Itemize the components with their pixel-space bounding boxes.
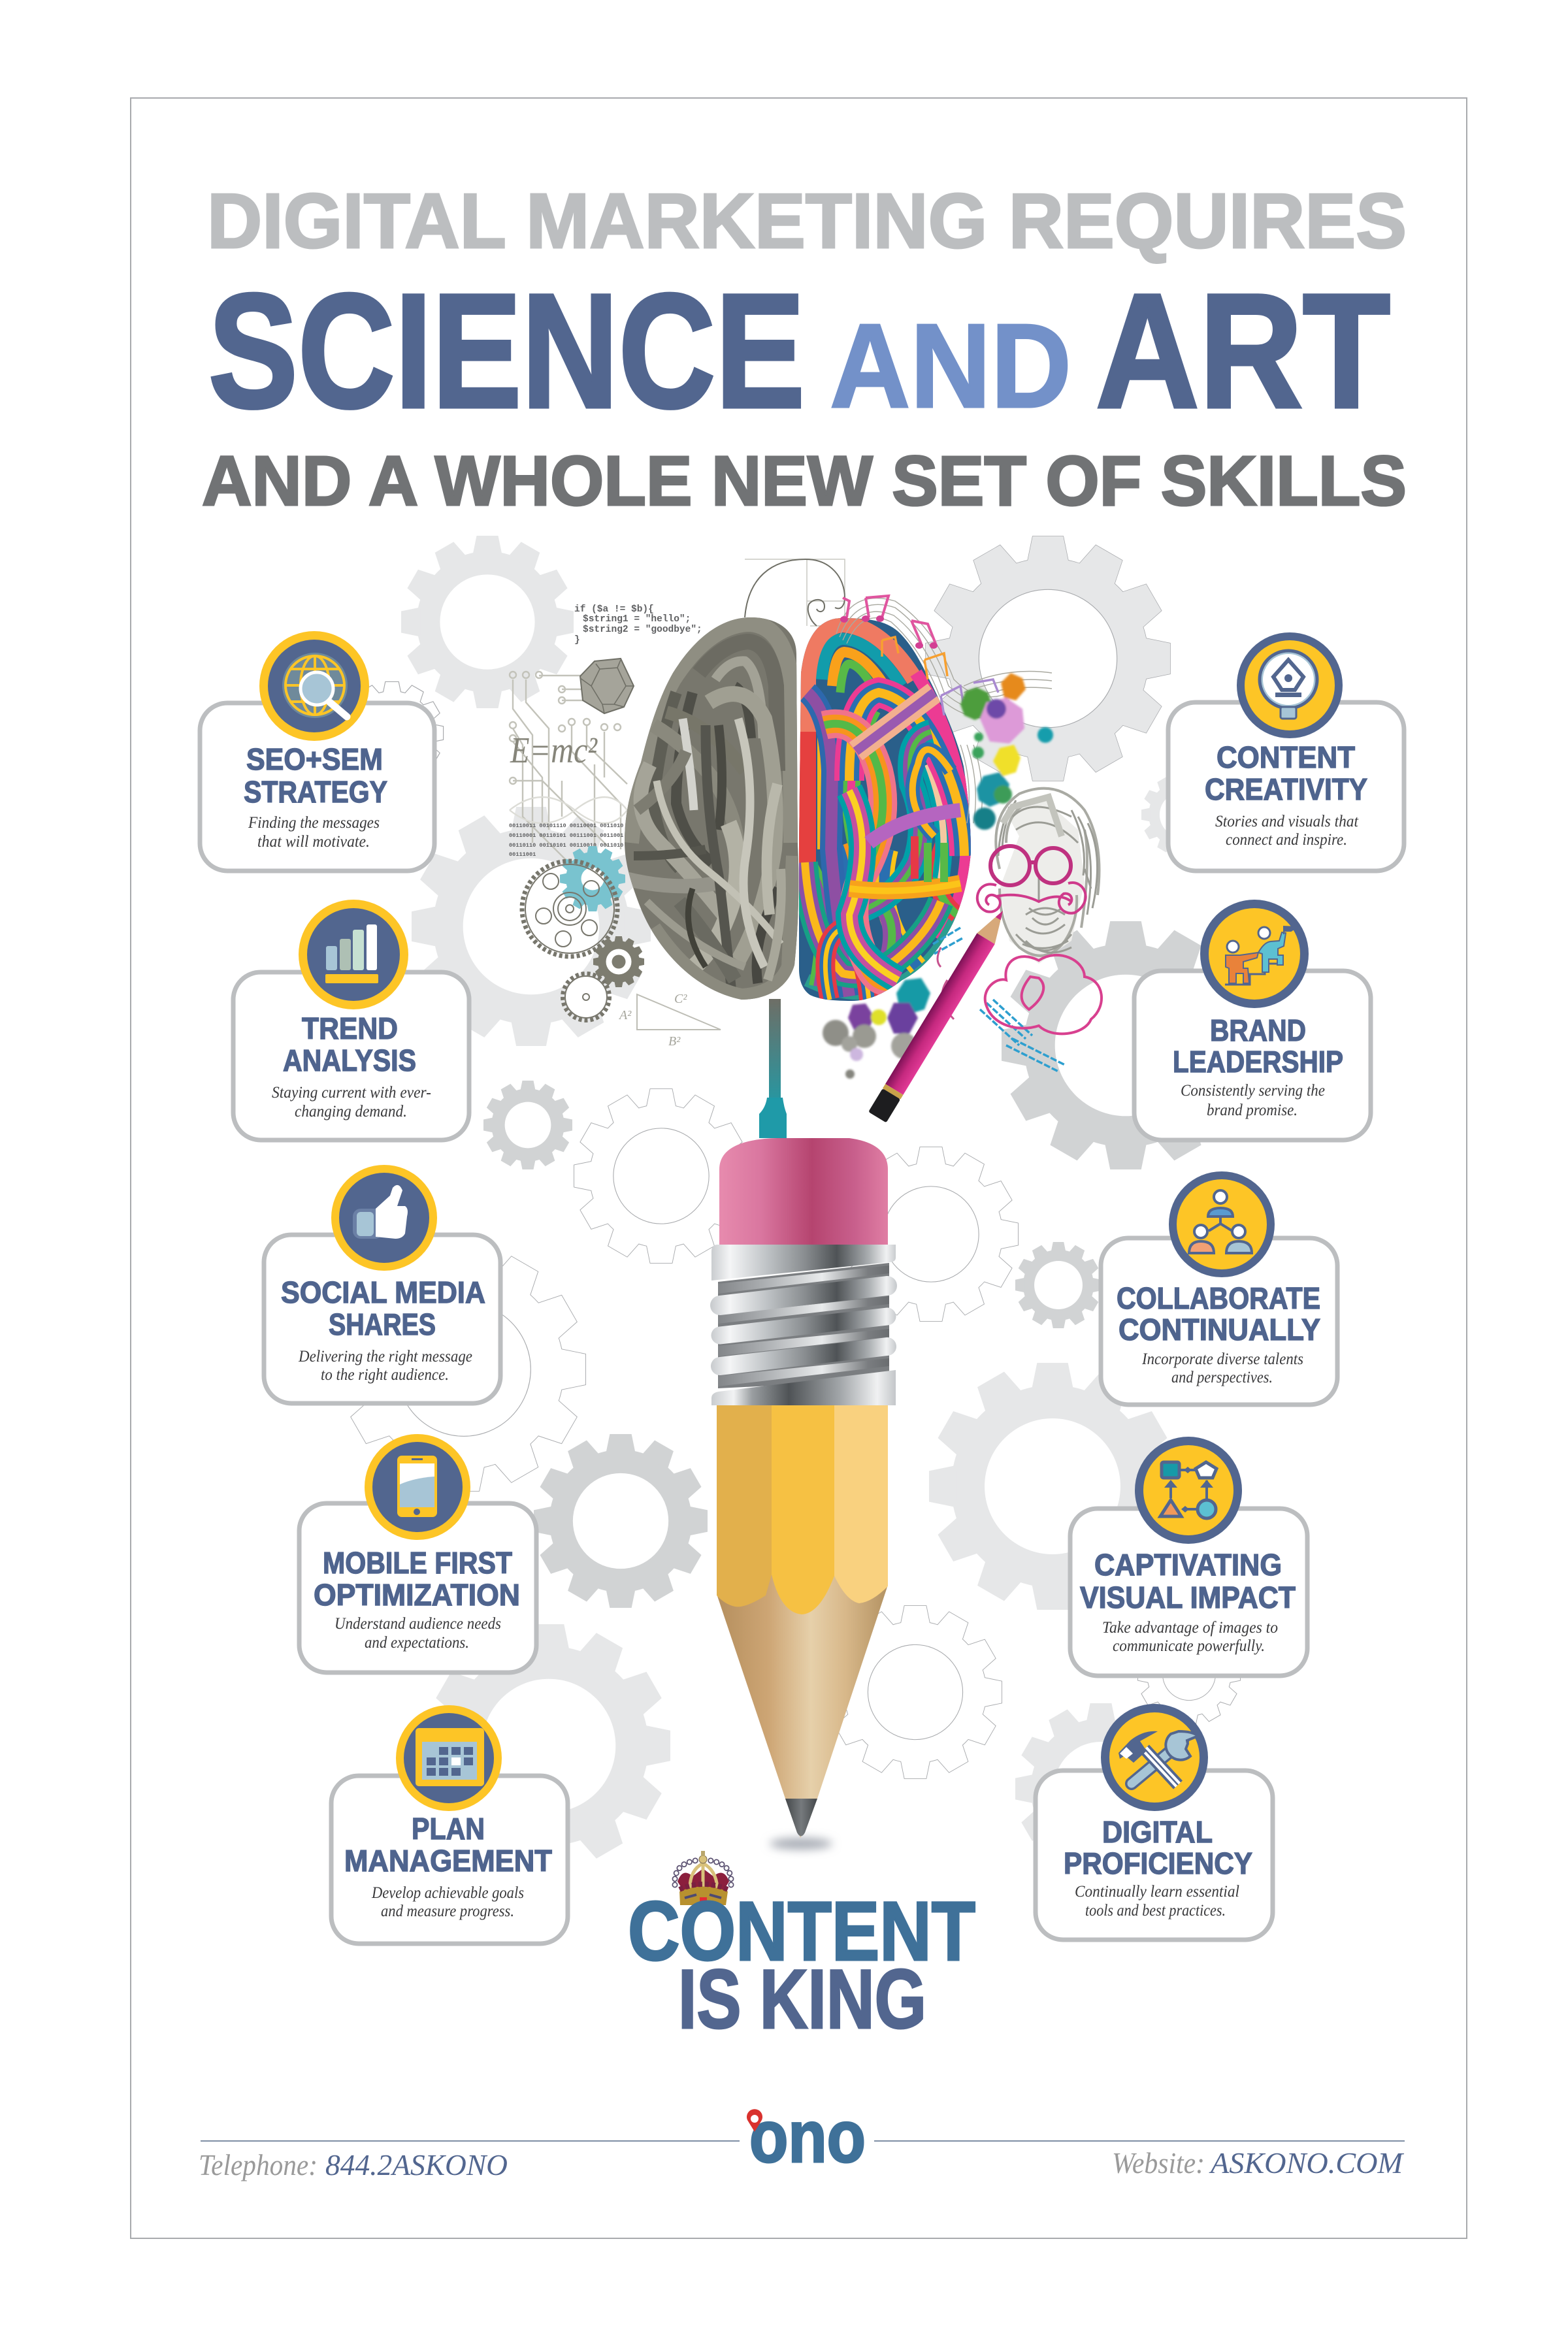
heading: ANALYSIS: [283, 1043, 416, 1077]
wood tip: [717, 1565, 888, 1838]
pencil lead: [785, 1799, 817, 1836]
skill card: Collaborate Continually: [1101, 1171, 1337, 1405]
icon: plan calendar: [396, 1705, 502, 1811]
paint splatters: [823, 673, 1053, 1079]
main pencil: [711, 1138, 896, 1850]
metal ferrule: [711, 1245, 896, 1405]
heading: CAPTIVATING: [1094, 1548, 1282, 1582]
brain: left grey hemisphere: [625, 617, 798, 1000]
science doodles: code, circuit, formula, gears: [509, 559, 845, 1049]
heading: [281, 1275, 485, 1341]
right triangle: A²: [618, 1008, 632, 1022]
heading: MOBILE FIRST: [323, 1546, 512, 1580]
title line: and a whole new set of skills: AND A WHOLE NEW SET OF SKILLS: [202, 441, 1407, 520]
title line: science and art: SCIENCE: [208, 260, 805, 442]
description: connect and inspire.: [1226, 831, 1347, 849]
background gears: [341, 536, 1250, 1874]
heading: SHARES: [329, 1307, 436, 1341]
description: that will motivate.: [257, 833, 370, 851]
title: [202, 178, 1407, 520]
heading: [283, 1011, 416, 1077]
title line: science and art: AND: [830, 299, 1071, 433]
heading: VISUAL IMPACT: [1080, 1580, 1296, 1614]
icon: light bulb with pen nib: [1237, 632, 1343, 738]
description: [1215, 813, 1359, 849]
description: Take advantage of images to: [1102, 1619, 1278, 1637]
description: [1141, 1350, 1303, 1386]
title line: science and art: [208, 260, 1390, 442]
description: [1075, 1883, 1239, 1919]
description: Delivering the right message: [298, 1348, 472, 1365]
code snippet: $string2 = "goodbye";: [583, 625, 702, 635]
brain: right colourful hemisphere: [799, 618, 971, 1001]
description: Understand audience needs: [335, 1615, 501, 1633]
content is king tagline: IS KING: [678, 1953, 926, 2046]
description: [335, 1615, 501, 1652]
formula: E=mc²: [510, 730, 598, 771]
right triangle: C²: [674, 992, 687, 1006]
heading: CREATIVITY: [1205, 772, 1367, 806]
description: [298, 1348, 472, 1384]
description: Staying current with ever-: [272, 1084, 431, 1102]
teal cog: [560, 846, 625, 911]
description: [1102, 1619, 1278, 1655]
telephone contact: Telephone:: [199, 2148, 318, 2181]
line gear: [522, 861, 617, 956]
right triangle: [618, 992, 721, 1049]
art pencil: [868, 906, 1012, 1122]
skill card: Brand Leadership: [1134, 900, 1371, 1140]
heading: OPTIMIZATION: [314, 1578, 520, 1612]
description: tools and best practices.: [1085, 1902, 1226, 1919]
description: and perspectives.: [1171, 1369, 1273, 1386]
description: changing demand.: [295, 1103, 407, 1120]
description: Develop achievable goals: [371, 1884, 524, 1902]
heading: PLAN: [412, 1812, 485, 1846]
heading: DIGITAL: [1102, 1815, 1213, 1849]
website contact: Website:: [1112, 2146, 1205, 2180]
eraser: [719, 1138, 888, 1245]
heading: COLLABORATE: [1117, 1281, 1320, 1315]
icon: hammer and wrench: [1101, 1704, 1208, 1811]
heading: [344, 1812, 552, 1878]
pencil shadow: [770, 1838, 832, 1850]
heading: PROFICIENCY: [1064, 1846, 1252, 1880]
heading: TREND: [302, 1011, 398, 1045]
description: Stories and visuals that: [1215, 813, 1359, 830]
icon: leaders on steps: [1200, 900, 1309, 1008]
connector stem: [759, 999, 787, 1138]
code snippet: if ($a != $b){: [574, 604, 654, 615]
music staff and notes: [836, 596, 1065, 1071]
icon: globe with magnifier: [259, 631, 369, 741]
description: [1181, 1082, 1325, 1119]
circuit traces: [510, 672, 627, 869]
description: Finding the messages: [248, 814, 380, 832]
footer divider lines: [201, 2140, 1405, 2142]
description: and expectations.: [365, 1634, 469, 1652]
heading: [1080, 1548, 1296, 1614]
heading: BRAND: [1210, 1013, 1306, 1047]
website contact: ASKONO.COM: [1209, 2146, 1405, 2180]
icon: smartphone: [365, 1434, 470, 1540]
dodecahedron: [580, 659, 634, 713]
description: [371, 1884, 524, 1920]
description: communicate powerfully.: [1113, 1637, 1265, 1655]
title line: digital marketing requires: DIGITAL MARKETING REQUIRES: [207, 178, 1407, 265]
description: [248, 814, 380, 851]
heading: [244, 742, 387, 809]
binary: 00110110 00110101 00110010 0011010: [509, 842, 623, 849]
content is king tagline: [628, 1885, 975, 2046]
icon: crown: [675, 1851, 731, 1905]
skill card: Social Media Shares: [264, 1165, 500, 1403]
small dark cog: [593, 936, 644, 987]
skill card: Mobile First Optimization: [299, 1434, 536, 1673]
description: brand promise.: [1207, 1102, 1298, 1119]
skill card: Content Creativity: [1168, 632, 1404, 871]
ono logo: ono: [749, 2096, 866, 2178]
heading: CONTINUALLY: [1119, 1313, 1320, 1347]
small line gear: [563, 973, 610, 1021]
yellow body: [717, 1405, 888, 1614]
heading: SEO+SEM: [246, 742, 383, 776]
binary: 00110001 00110101 00111001 0011001: [509, 832, 623, 839]
telephone contact: [199, 2148, 508, 2181]
skill card: Captivating Visual Impact: [1070, 1437, 1307, 1676]
binary: [509, 823, 623, 858]
description: Consistently serving the: [1181, 1082, 1325, 1100]
heading: [1117, 1281, 1320, 1347]
icon: thumbs up: [331, 1165, 437, 1271]
heading: SOCIAL MEDIA: [281, 1275, 485, 1309]
golden spiral: [745, 559, 845, 626]
content is king tagline: CONTENT: [628, 1885, 975, 1978]
code snippet: }: [574, 635, 580, 645]
icon: shapes flow diagram: [1135, 1437, 1242, 1544]
heading: CONTENT: [1217, 740, 1355, 774]
binary: 00111001: [509, 851, 536, 858]
icon: three team members: [1169, 1171, 1275, 1277]
code snippet: [574, 604, 702, 645]
code snippet: $string1 = "hello";: [583, 614, 691, 625]
skill card: Trend Analysis: [233, 900, 469, 1140]
right triangle: B²: [668, 1034, 681, 1049]
skill card: Digital Proficiency: [1036, 1704, 1273, 1940]
description: and measure progress.: [381, 1903, 514, 1920]
icon: bar chart: [299, 900, 408, 1009]
heading: [314, 1546, 520, 1612]
heading: [1064, 1815, 1252, 1880]
description: to the right audience.: [321, 1366, 449, 1384]
title line: science and art: ART: [1096, 260, 1390, 442]
heading: LEADERSHIP: [1173, 1045, 1343, 1079]
poster frame: [131, 98, 1467, 2238]
skill card: Plan Management: [331, 1705, 568, 1944]
portrait sketch: [938, 789, 1102, 1034]
heading: [1205, 740, 1367, 806]
telephone contact: 844.2ASKONO: [325, 2148, 508, 2181]
description: [272, 1084, 431, 1120]
heading: STRATEGY: [244, 775, 387, 809]
skill card: SEO+SEM Strategy: [200, 631, 434, 871]
binary: 00110011 00101110 00110001 0011010: [509, 823, 623, 829]
website contact: [1112, 2146, 1405, 2180]
description: Continually learn essential: [1075, 1883, 1239, 1901]
heading: [1173, 1013, 1343, 1079]
description: Incorporate diverse talents: [1141, 1350, 1303, 1368]
heading: MANAGEMENT: [344, 1844, 552, 1878]
